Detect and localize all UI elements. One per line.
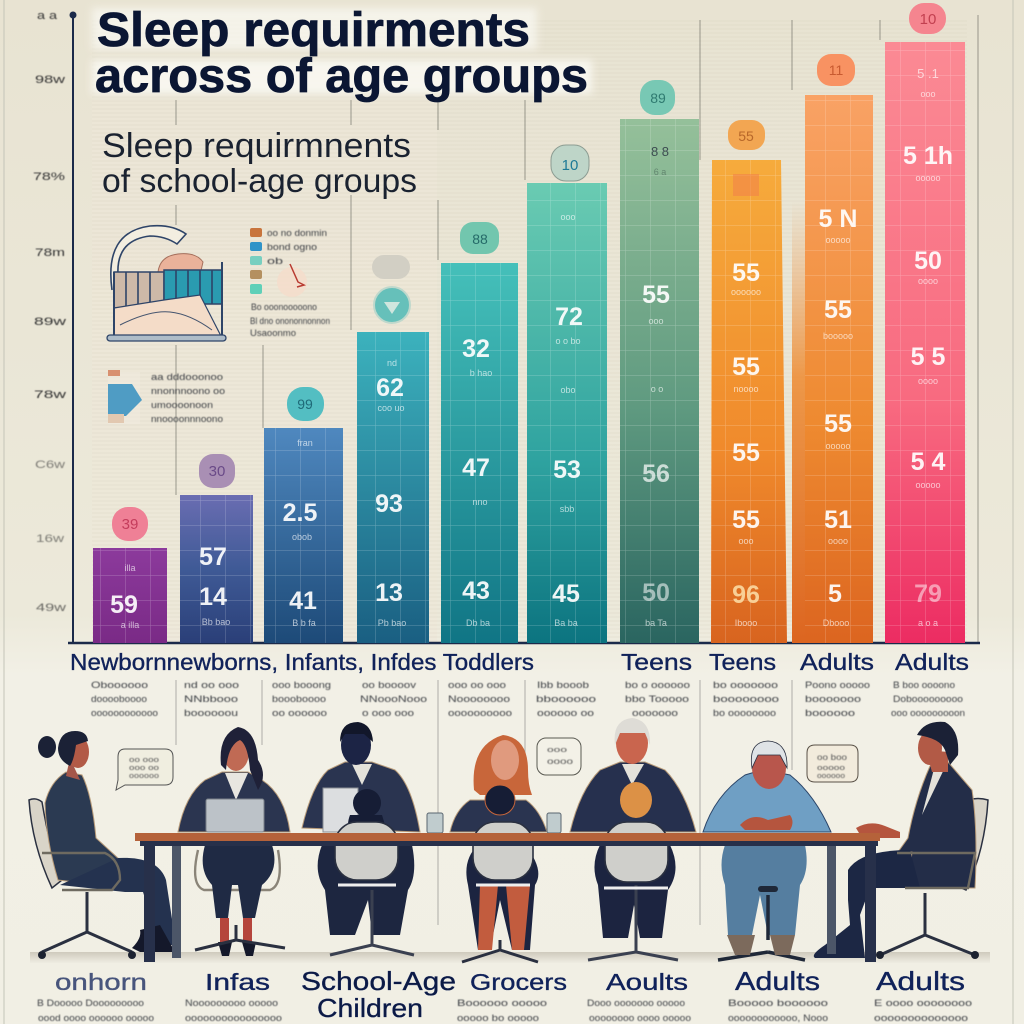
y axis labels: 98w [35, 74, 65, 86]
bar: infants: 14 [199, 583, 227, 611]
bar: adults: booooo [823, 331, 853, 341]
value badges: 99 [297, 396, 313, 412]
bar: newborns: 59 [110, 591, 138, 619]
value badges: 10 [562, 157, 578, 174]
bar: adults 2: oooo [918, 376, 938, 386]
bar: teens: 8 8 [651, 144, 669, 159]
bottom age labels [55, 966, 965, 1023]
age group descriptions: oooooooooo [448, 708, 512, 718]
legend: crib: oo no donmin [267, 228, 327, 238]
bar chart [93, 42, 965, 643]
bottom age labels: onhorn [55, 969, 147, 995]
age group labels: Newbornnewborns, Infants, Infdes Toddlers [70, 649, 534, 675]
bar: adults: ooooo [825, 441, 851, 451]
bar: newborns [93, 548, 167, 643]
bar: teens [620, 119, 699, 643]
age group descriptions: dooooboooo [91, 694, 147, 704]
person: red-haired woman with child [450, 735, 561, 962]
age group descriptions: ooo oo ooo [448, 680, 506, 690]
value badges [112, 3, 946, 541]
age group descriptions: ooo ooooooooon [891, 708, 965, 718]
y axis labels: a a [37, 10, 58, 22]
title [92, 4, 592, 103]
y axis labels: 89w [34, 316, 66, 328]
bar: adults: Dbooo [823, 618, 849, 628]
speech bubbles: ooo [547, 747, 567, 754]
bottom descriptions: Nooooooooo ooooo [185, 998, 278, 1008]
bar: toddlers: Pb bao [378, 618, 406, 628]
legend: crib: Usaoonmo [250, 328, 296, 338]
bar: adults: 55 [824, 296, 852, 324]
bar: adults 2: 5 4 [911, 448, 945, 476]
speech bubbles [116, 738, 858, 790]
bar: toddlers [357, 332, 429, 643]
age group descriptions: oooooo oo [537, 708, 594, 718]
bar: toddlers: 62 [376, 374, 404, 402]
y axis labels: 78w [34, 389, 66, 401]
age group labels [70, 649, 969, 675]
age group descriptions: bo oooooooo [713, 708, 776, 718]
bar: adults [792, 95, 873, 643]
bottom descriptions [37, 998, 972, 1023]
person: elderly man [703, 741, 831, 960]
bar: adults 2 [885, 42, 965, 643]
bar: young children: 41 [289, 587, 317, 615]
bar: school-age: ooo [560, 212, 576, 222]
legend: crib [250, 228, 330, 338]
person: woman left [29, 731, 176, 959]
bar: teens: ba Ta [645, 618, 667, 628]
subtitle: Sleep requirmnents [102, 127, 411, 165]
bottom descriptions: E oooo oooooooo [874, 998, 972, 1008]
age group labels: Adults [800, 649, 874, 675]
age group descriptions: Ibb booob [537, 680, 589, 690]
side note [108, 370, 225, 424]
speech bubbles: ooooo [817, 765, 845, 772]
age group descriptions: boooboooo [272, 694, 326, 704]
age group descriptions: bo ooooooo [713, 680, 778, 690]
bar: adults 2: ooooo [915, 173, 941, 183]
bar: young children: 2.5 [283, 499, 317, 527]
bar: adults: ooooo [825, 235, 851, 245]
bar: preschool: 43 [462, 577, 490, 605]
bottom descriptions: oooooooo oooo ooooo [589, 1013, 691, 1023]
age group descriptions: oo boooov [362, 680, 417, 690]
age group descriptions: bboooooo [536, 694, 596, 704]
bar: adults 2: ooooo [915, 480, 941, 490]
age group descriptions: ooo booong [272, 680, 331, 690]
bar: school-age: sbb [560, 504, 574, 514]
bar: teens: 56 [642, 460, 670, 488]
bar: infants: Bb bao [202, 617, 230, 627]
y axis labels: 49w [36, 602, 66, 614]
bottom descriptions: Booooo boooooo [728, 998, 828, 1008]
bar: young children: B b fa [292, 618, 316, 628]
age group descriptions: boooooo [805, 708, 855, 718]
bar: adults: 55 [824, 410, 852, 438]
value badges: 10 [920, 11, 936, 28]
y axis labels: 16w [36, 533, 64, 545]
subtitle [102, 127, 417, 199]
icon: crib illustration [107, 226, 226, 341]
bar: adults 2: 5 1h [903, 142, 953, 170]
title: across of age groups [95, 50, 588, 103]
age group descriptions: nd oo ooo [184, 680, 239, 690]
bottom descriptions: oooooooooooooooo [185, 1013, 282, 1023]
bar: teens: 6 a [654, 167, 666, 177]
bar: adults: oooo [828, 536, 848, 546]
legend: crib: ob [267, 256, 283, 266]
bar: adults 2: 79 [914, 580, 942, 608]
age group descriptions: boooooou [184, 708, 238, 718]
bar: teens 2: 55 [732, 259, 760, 287]
bottom age labels: Aoults [606, 969, 688, 995]
bottom descriptions: B Dooooo Dooooooooo [37, 998, 144, 1008]
legend: crib: Bo ooonooooono [251, 302, 317, 312]
bar: adults 2: 5 .1 [917, 66, 939, 81]
speech bubbles: ooo oo [129, 765, 159, 772]
age group descriptions: oo oooooo [272, 708, 327, 718]
age group descriptions: bbo Tooooo [625, 694, 689, 704]
bottom age labels: Adults [876, 966, 965, 996]
bar: preschool: b hao [470, 368, 492, 378]
bottom descriptions: ooooo bo ooooo [457, 1013, 539, 1023]
bar: infants [180, 495, 253, 643]
age group descriptions: Noooooooo [448, 694, 510, 704]
bar: toddlers: 93 [375, 490, 403, 518]
age group descriptions: NNbbooo [184, 694, 238, 704]
bar: school-age: obo [560, 385, 576, 395]
bar: teens 2: 55 [732, 353, 760, 381]
value badges: 30 [209, 463, 225, 480]
age group descriptions: Poono ooooo [805, 680, 870, 690]
speech bubbles: oooo [547, 757, 574, 766]
bottom age labels: Infas [205, 969, 270, 995]
bar: school-age [527, 183, 607, 643]
value badges: 11 [829, 62, 843, 78]
bottom age labels: Grocers [470, 969, 567, 995]
value badges: 39 [122, 516, 138, 533]
legend: crib: Bl dno onononnonnon [250, 316, 330, 326]
bar: teens 2: 55 [732, 506, 760, 534]
y axis labels: 78% [33, 171, 65, 183]
subtitle: of school-age groups [102, 162, 417, 199]
bottom age labels: Adults [735, 966, 820, 996]
bar: preschool: Db ba [466, 618, 490, 628]
age group descriptions: o ooo ooo [362, 708, 414, 718]
value badges: 88 [472, 231, 488, 247]
age group descriptions: NNoooNooo [360, 694, 427, 704]
bottom age labels: Children [317, 993, 423, 1023]
title: Sleep requirments [97, 4, 530, 57]
bottom descriptions: oooooooooooooo [874, 1013, 968, 1023]
bar: teens: o o [651, 384, 663, 394]
side note: aa dddooonoo [151, 372, 223, 382]
value badges: 89 [650, 90, 666, 106]
bar: infants: 57 [199, 543, 227, 571]
bar: adults: 51 [824, 506, 852, 534]
bar: teens: ooo [648, 316, 664, 326]
bar: school-age: o o bo [555, 336, 581, 346]
bar: preschool: 32 [462, 335, 490, 363]
bar: toddlers: nd [387, 358, 397, 368]
age group descriptions: Dobooooooooo [893, 694, 963, 704]
age group descriptions: oooooooooooo [91, 708, 158, 718]
bar: school-age: Ba ba [554, 618, 578, 628]
age group descriptions: ooooooo [632, 708, 678, 718]
y axis [33, 10, 980, 643]
bar: young children [264, 428, 343, 643]
bar: adults 2: 50 [914, 247, 942, 275]
age group labels: Teens [709, 649, 776, 675]
side note: umoooonoon [151, 400, 213, 410]
bar: adults 2: a o a [918, 618, 938, 628]
bar: young children: fran [297, 438, 313, 448]
value badges: 55 [738, 128, 754, 144]
bar: teens 2: 96 [732, 581, 760, 609]
person: older man with child [570, 718, 696, 960]
bar: school-age: 53 [553, 456, 581, 484]
floor shadow [30, 952, 990, 963]
bar: teens: 55 [642, 281, 670, 309]
side note: nnonnnoono oo [151, 386, 225, 396]
age group descriptions: Oboooooo [91, 680, 148, 690]
striped chart backdrop [92, 15, 978, 925]
age group descriptions: bo o oooooo [625, 680, 690, 690]
bar: adults: 5 N [819, 205, 857, 233]
speech bubbles: oooooo [129, 773, 159, 780]
age group descriptions: boooooooo [713, 694, 779, 704]
bottom descriptions: Boooooo ooooo [457, 998, 547, 1008]
bar: adults 2: oooo [918, 276, 938, 286]
legend: crib: bond ogno [267, 242, 317, 252]
bar: preschool: 47 [462, 454, 490, 482]
y axis labels [33, 10, 66, 614]
bar: young children: obob [292, 532, 312, 542]
bar: teens: 50 [642, 579, 670, 607]
bar: newborns: a illa [121, 620, 139, 630]
bar: adults 2: 5 5 [911, 343, 945, 371]
bar: adults 2: ooo [920, 89, 936, 99]
speech bubbles: oo boo [817, 753, 848, 762]
side note: nnoooonnnoono [151, 414, 223, 424]
person: man with child [302, 722, 443, 955]
icon: gauge [277, 264, 307, 297]
bar: teens 2: ooo [738, 536, 754, 546]
bar: toddlers: coo uo [377, 403, 405, 413]
age group descriptions: booooooo [805, 694, 861, 704]
bar: preschool: nno [472, 497, 488, 507]
speech bubbles: oo ooo [129, 757, 159, 764]
y axis labels: C6w [35, 459, 65, 471]
age group labels: Teens [621, 649, 692, 675]
speech bubbles: oooooo [817, 773, 845, 780]
bar: teens 2: 55 [732, 439, 760, 467]
person: woman with laptop [178, 727, 290, 956]
age group descriptions [91, 680, 965, 718]
bar: adults: 5 [828, 580, 842, 608]
bar: school-age: 72 [555, 303, 583, 331]
table [135, 833, 880, 962]
bar: toddlers: 13 [375, 579, 403, 607]
bar: teens 2: oooooo [731, 287, 761, 297]
y axis labels: 78m [35, 247, 65, 259]
bar: preschool [441, 263, 518, 643]
age group labels: Adults [895, 649, 969, 675]
bar: teens 2: Ibooo [735, 618, 757, 628]
bottom age labels: School-Age [301, 966, 456, 996]
bottom descriptions: oood oooo oooooo ooooo [38, 1013, 154, 1023]
bar: newborns: illa [124, 563, 136, 573]
bottom descriptions: Dooo ooooooo ooooo [587, 998, 685, 1008]
person: man right [814, 722, 988, 959]
bar: teens 2 [711, 160, 787, 643]
bar: school-age: 45 [552, 580, 580, 608]
age group descriptions: B boo oooono [893, 680, 955, 690]
bottom descriptions: oooooooooooo, Nooo [728, 1013, 828, 1023]
bar: teens 2: noooo [733, 384, 759, 394]
